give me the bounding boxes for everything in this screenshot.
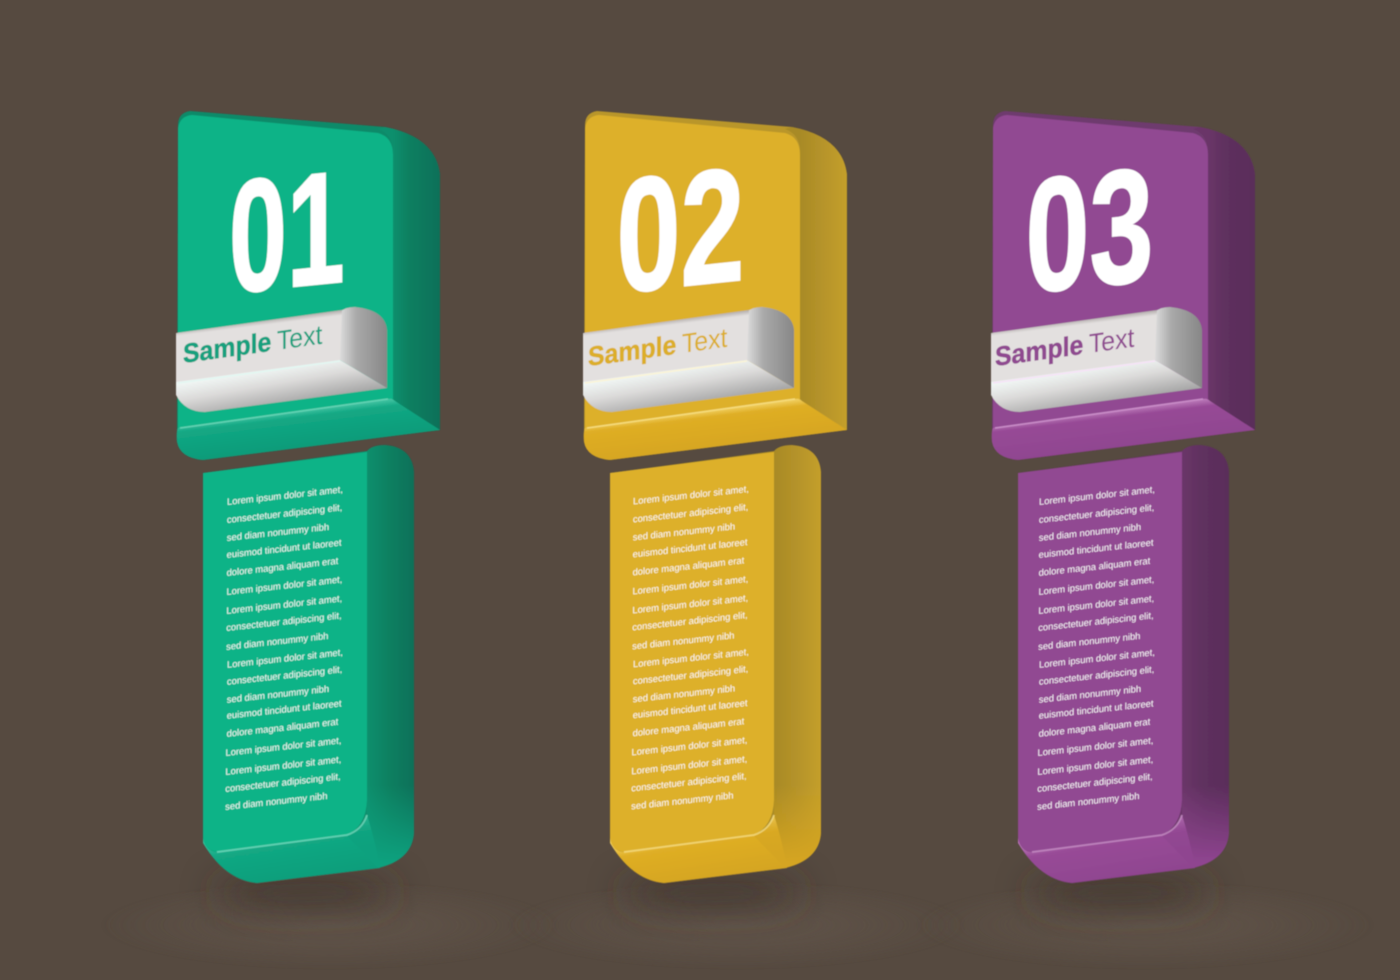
paragraph 01: sed diam nonummy nibh xyxy=(227,684,329,706)
paragraph 02: consectetuer adipiscing elit, xyxy=(632,610,748,633)
paragraph 02: Lorem ipsum dolor sit amet, xyxy=(631,754,747,777)
header block 01 xyxy=(177,111,440,460)
paragraph 02: Lorem ipsum dolor sit amet, xyxy=(632,574,748,597)
paragraph 01: euismod tincidunt ut laoreet xyxy=(227,698,342,722)
banner label 02: SampleText xyxy=(588,322,728,372)
paragraph 01: sed diam nonummy nibh xyxy=(227,522,329,544)
paragraph 01: consectetuer adipiscing elit, xyxy=(226,610,342,634)
paragraph 03: sed diam nonummy nibh xyxy=(1037,791,1139,813)
paragraph 02: consectetuer adipiscing elit, xyxy=(631,771,747,794)
paragraph 02: sed diam nonummy nibh xyxy=(631,790,733,812)
paragraph 01: consectetuer adipiscing elit, xyxy=(227,502,342,526)
paragraph 03: consectetuer adipiscing elit, xyxy=(1037,771,1153,795)
body block 03 xyxy=(1018,445,1229,883)
paragraph 02: dolore magna aliquam erat xyxy=(633,716,745,739)
floor shadow 03 xyxy=(915,880,1375,970)
paragraph 01: consectetuer adipiscing elit, xyxy=(225,771,341,795)
paragraph 02: Lorem ipsum dolor sit amet, xyxy=(633,647,749,670)
paragraph 01: Lorem ipsum dolor sit amet, xyxy=(226,574,342,598)
paragraph 01: euismod tincidunt ut laoreet xyxy=(227,538,342,561)
paragraph 02: Lorem ipsum dolor sit amet, xyxy=(631,735,747,758)
floor shadow 01 xyxy=(100,880,560,970)
paragraph 03: dolore magna aliquam erat xyxy=(1039,556,1151,579)
paragraph 03: Lorem ipsum dolor sit amet, xyxy=(1039,484,1155,508)
paragraph 03: sed diam nonummy nibh xyxy=(1039,684,1141,706)
paragraph 03: consectetuer adipiscing elit, xyxy=(1039,664,1154,688)
panel: step 01 green xyxy=(100,111,560,970)
paragraph 01: Lorem ipsum dolor sit amet, xyxy=(225,754,341,778)
paragraph 03: sed diam nonummy nibh xyxy=(1039,522,1141,544)
floor shadow 02 xyxy=(507,880,967,970)
paragraph 02: euismod tincidunt ut laoreet xyxy=(633,698,748,721)
paragraph 01: Lorem ipsum dolor sit amet, xyxy=(226,593,342,617)
number 03: 03 xyxy=(1026,133,1153,328)
paragraph 02: consectetuer adipiscing elit, xyxy=(633,664,748,687)
paragraph 03: Lorem ipsum dolor sit amet, xyxy=(1039,647,1155,671)
paragraph 03: Lorem ipsum dolor sit amet, xyxy=(1037,754,1153,778)
paragraph 03: dolore magna aliquam erat xyxy=(1039,717,1151,740)
banner label 03: SampleText xyxy=(995,322,1135,372)
paragraph 02: dolore magna aliquam erat xyxy=(633,555,745,578)
number 02: 02 xyxy=(616,133,744,328)
paragraph 01: consectetuer adipiscing elit, xyxy=(227,664,342,688)
paragraph 03: Lorem ipsum dolor sit amet, xyxy=(1038,574,1154,598)
paragraph 03: consectetuer adipiscing elit, xyxy=(1038,610,1154,634)
paragraph 02: Lorem ipsum dolor sit amet, xyxy=(633,484,749,507)
paragraph 03: consectetuer adipiscing elit, xyxy=(1039,502,1154,526)
header block 02 xyxy=(584,111,847,460)
sample text banner 01 xyxy=(176,307,387,412)
paragraph 01: Lorem ipsum dolor sit amet, xyxy=(227,484,343,508)
paragraph 03: euismod tincidunt ut laoreet xyxy=(1039,698,1154,722)
paragraph 02: sed diam nonummy nibh xyxy=(633,521,735,543)
panel: step 02 yellow xyxy=(507,111,967,970)
paragraph 03: euismod tincidunt ut laoreet xyxy=(1039,538,1154,561)
paragraph 02: sed diam nonummy nibh xyxy=(633,683,735,705)
banner label 01: SampleText xyxy=(183,319,323,369)
paragraph 01: sed diam nonummy nibh xyxy=(226,631,328,653)
sample text banner 02 xyxy=(583,307,794,412)
paragraph 03: Lorem ipsum dolor sit amet, xyxy=(1037,735,1153,759)
paragraph 01: Lorem ipsum dolor sit amet, xyxy=(225,735,341,759)
paragraph 01: sed diam nonummy nibh xyxy=(225,791,327,813)
paragraph 03: sed diam nonummy nibh xyxy=(1038,631,1140,653)
paragraph 03: Lorem ipsum dolor sit amet, xyxy=(1038,593,1154,617)
header block 03 xyxy=(992,111,1255,460)
panel: step 03 purple xyxy=(915,111,1375,970)
paragraph 02: consectetuer adipiscing elit, xyxy=(633,502,748,525)
body block 02 xyxy=(610,445,821,883)
paragraph 01: dolore magna aliquam erat xyxy=(227,717,339,740)
sample text banner 03 xyxy=(991,307,1202,412)
paragraph 01: dolore magna aliquam erat xyxy=(227,556,339,579)
paragraph 02: Lorem ipsum dolor sit amet, xyxy=(632,593,748,616)
paragraph 01: Lorem ipsum dolor sit amet, xyxy=(227,647,343,671)
paragraph 02: euismod tincidunt ut laoreet xyxy=(633,537,748,560)
body block 01 xyxy=(203,445,414,883)
paragraph 02: sed diam nonummy nibh xyxy=(632,630,734,652)
number 01: 01 xyxy=(229,137,345,327)
